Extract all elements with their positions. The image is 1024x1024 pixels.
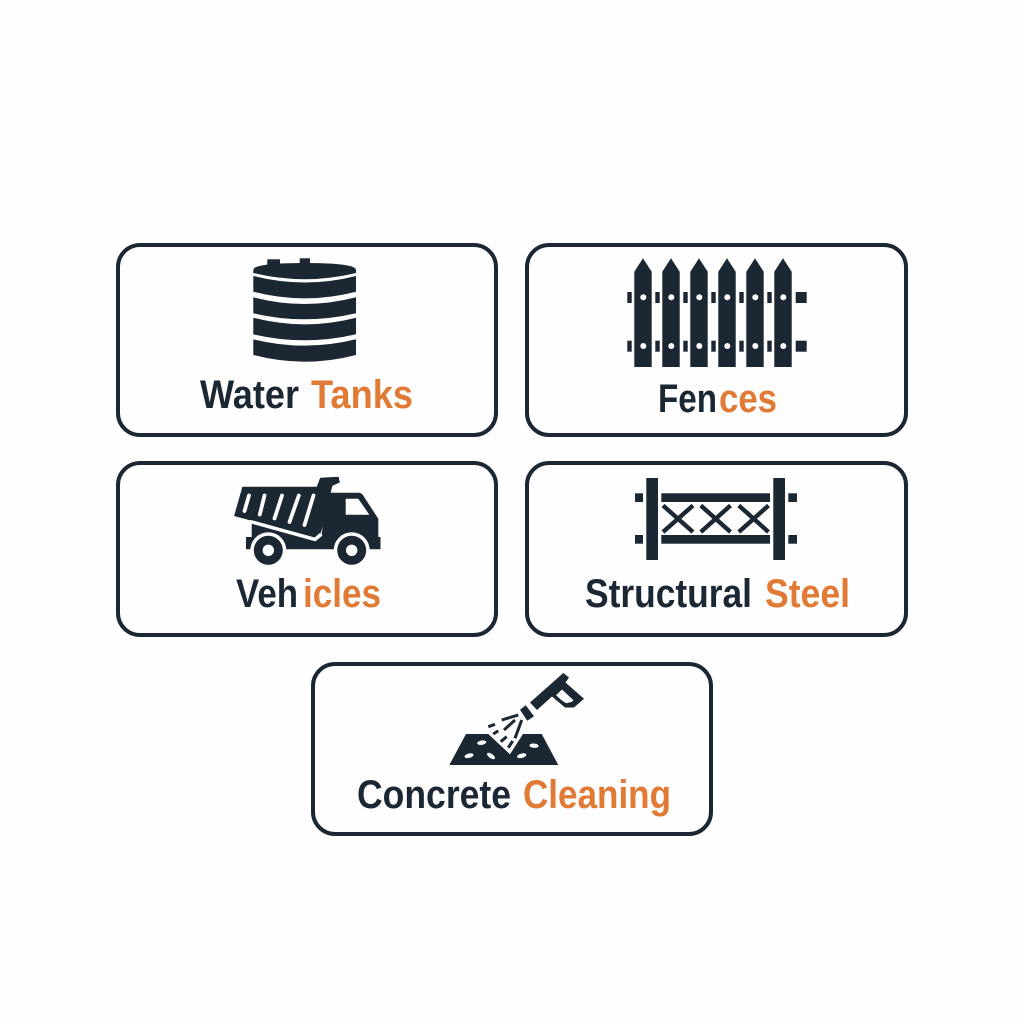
label: Structural Steel: Steel — [765, 572, 850, 616]
label: Concrete Cleaning — [357, 773, 671, 817]
panel: concrete cleaning — [313, 664, 711, 834]
panel: water tanks — [118, 245, 496, 435]
card outline: water tanks — [118, 245, 496, 435]
icon: picket fence — [627, 258, 807, 367]
icon: water tank — [253, 258, 356, 362]
label: Water Tanks: Tanks — [311, 373, 413, 417]
label: Concrete Cleaning: Concrete — [357, 773, 511, 817]
label: Water Tanks: Water — [200, 373, 299, 417]
card outline: fences — [527, 245, 906, 435]
label: Structural Steel: Structural — [585, 572, 752, 616]
card outline: structural steel — [527, 463, 906, 635]
icon: dump truck — [235, 478, 380, 568]
icon: steel truss — [635, 478, 797, 560]
label: Water Tanks — [200, 373, 413, 417]
card outline: vehicles — [118, 463, 496, 635]
label: Fences — [658, 377, 777, 421]
label: Vehicles: icles — [303, 572, 381, 616]
panel: vehicles — [118, 463, 496, 635]
label: Fences: Fen — [658, 377, 717, 421]
card outline: concrete cleaning — [313, 664, 711, 834]
panel: fences — [527, 245, 906, 435]
label: Concrete Cleaning: Cleaning — [523, 773, 671, 817]
label: Fences: ces — [719, 377, 777, 421]
panel: structural steel — [527, 463, 906, 635]
icon: pressure washer on concrete — [449, 673, 584, 765]
label: Vehicles: Veh — [236, 572, 298, 616]
label: Vehicles — [236, 572, 381, 616]
